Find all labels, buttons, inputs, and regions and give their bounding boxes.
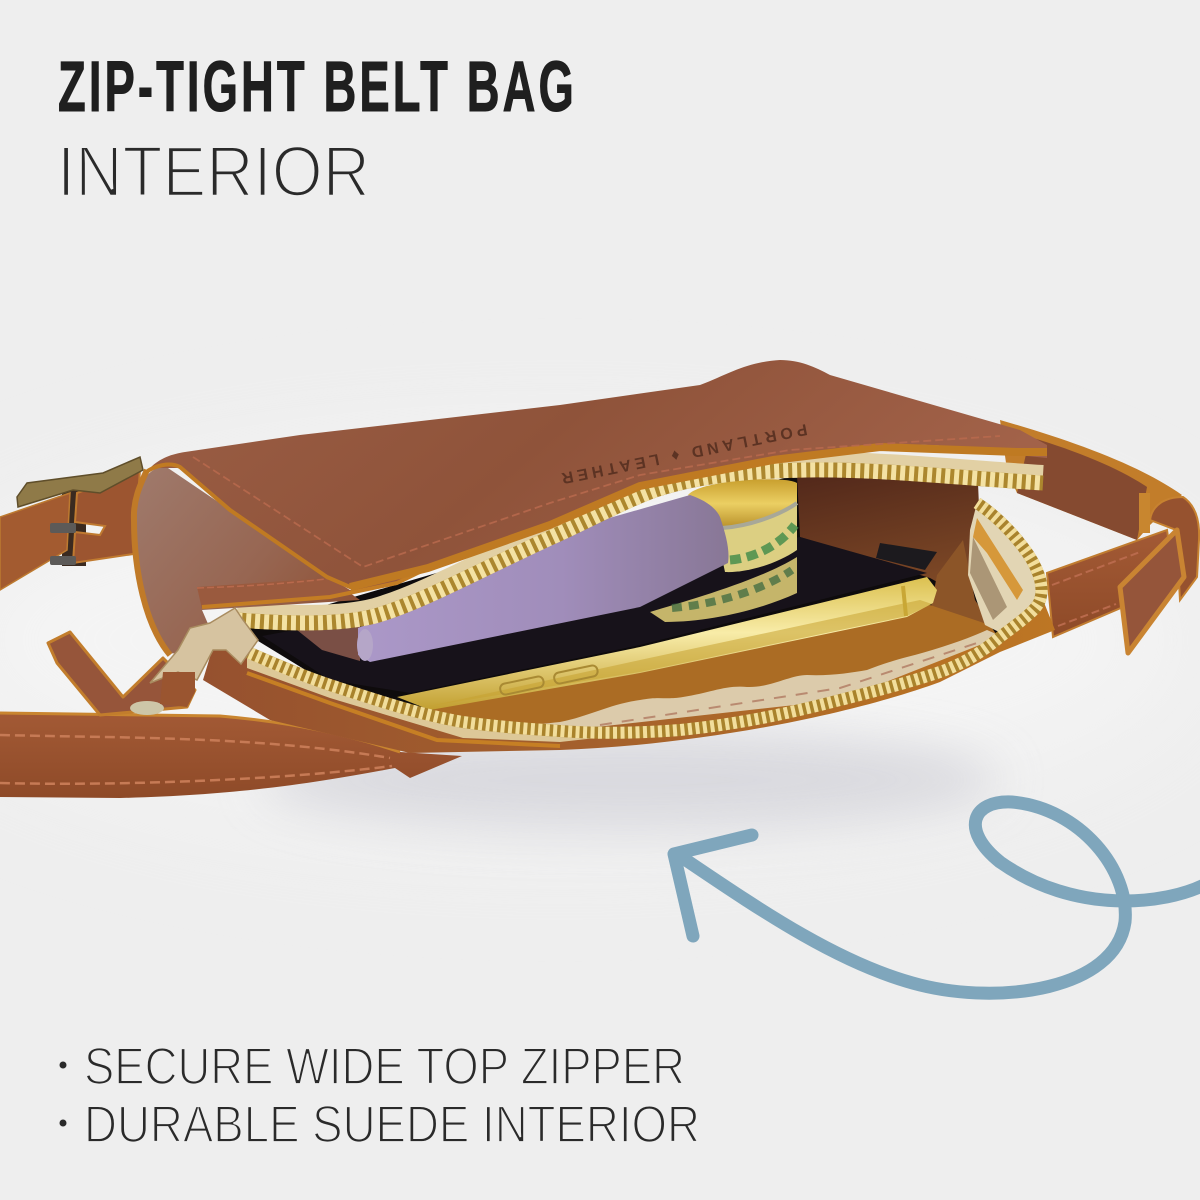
feature bullets: DURABLE SUEDE INTERIOR <box>84 1096 700 1154</box>
bottom leather lip <box>203 600 1055 753</box>
feature bullets: SECURE WIDE TOP ZIPPER <box>84 1038 685 1096</box>
curly arrow <box>674 802 1200 993</box>
zipper pull <box>150 608 258 707</box>
bag interior base <box>240 472 1040 731</box>
feature bullets <box>60 1038 700 1154</box>
title <box>57 47 574 212</box>
right side lining <box>968 503 1040 635</box>
front strap <box>0 713 462 798</box>
tin and reflection <box>650 479 797 622</box>
top zipper <box>237 462 1043 623</box>
bullet one <box>60 1062 66 1068</box>
left upper strap and buckle <box>0 457 143 590</box>
rear right strap <box>1000 420 1199 653</box>
brand stamp: PORTLAND ♦ LEATHER <box>560 420 809 486</box>
suede interior <box>420 605 1000 732</box>
bag side panel <box>134 466 428 655</box>
strap tab and snap <box>48 632 195 715</box>
title: ZIP-TIGHT BELT BAG <box>58 47 574 126</box>
phone <box>262 537 937 710</box>
bullet two <box>60 1120 66 1126</box>
bottom zipper <box>243 503 1041 746</box>
wavy tape lining <box>470 630 1010 738</box>
purple pouch <box>297 495 729 662</box>
bag front leather panel <box>145 360 1047 587</box>
bag shadow <box>260 730 1000 830</box>
title: INTERIOR <box>57 133 370 212</box>
